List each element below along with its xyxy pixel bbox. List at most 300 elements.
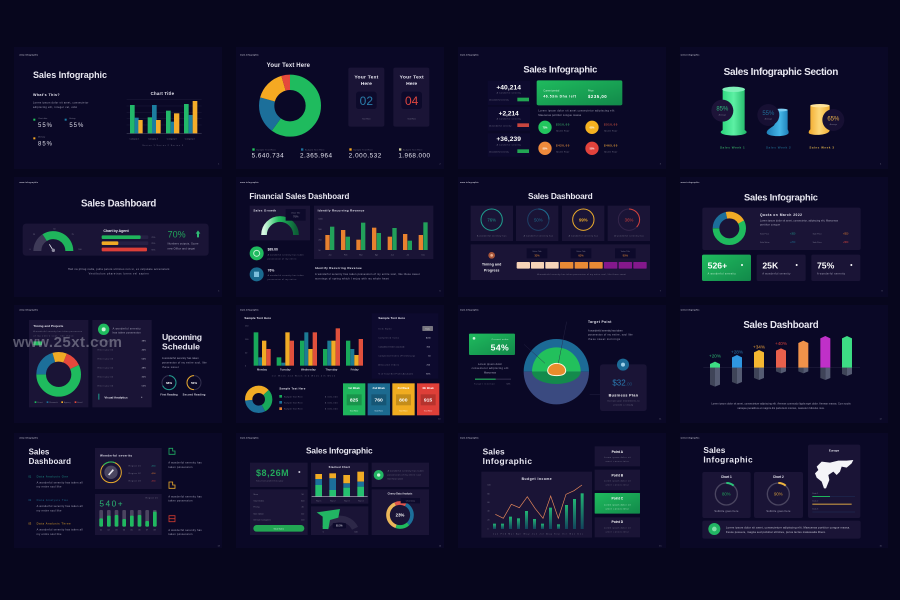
panel: timing donut: Direct bbox=[37, 401, 43, 404]
panel: stacked chart: Year 2 bbox=[330, 499, 335, 502]
target point text bbox=[588, 320, 633, 341]
panel: quota: +$50 bbox=[843, 233, 849, 235]
metric circles: Insert Your bbox=[604, 129, 618, 132]
percent labels: +20% bbox=[709, 354, 721, 359]
slide 8: quota panel: 8 bbox=[881, 291, 883, 293]
card: 99 percent: 99% bbox=[579, 217, 588, 222]
panel: sales growth: Sales Growth bbox=[253, 209, 276, 213]
metric circles: 80% bbox=[543, 148, 548, 150]
bar chart: Category 2 bbox=[148, 137, 158, 140]
slide 9: upcoming schedule: www.infographic bbox=[19, 309, 39, 312]
metric: percent: 76% bbox=[268, 268, 274, 272]
panel: chart 2: Subtitle goes here bbox=[766, 510, 791, 513]
metric circles: $465,00 bbox=[604, 144, 618, 148]
panel: timing donut: Timing and Projects bbox=[33, 324, 64, 328]
icon note 3: A wonderful serenity has bbox=[168, 529, 202, 532]
panel: rows: 100 bbox=[301, 520, 305, 522]
donut legend: $ 000,000 bbox=[325, 396, 339, 398]
business plan card bbox=[600, 359, 647, 411]
panel: wonderful severity bbox=[95, 448, 162, 489]
panel: sales growth: 76% bbox=[293, 215, 299, 219]
data table bbox=[372, 313, 438, 379]
grouped bar chart: Thursday bbox=[325, 368, 338, 372]
slide 14: sales infographic multi-panel: 14 bbox=[439, 546, 442, 548]
point A: Point A bbox=[612, 450, 624, 454]
grouped bar chart: Wednesday bbox=[301, 368, 316, 372]
slide 12: 3D bars: 12 bbox=[880, 418, 882, 420]
slide 2: donut with counters: 2 bbox=[439, 163, 441, 165]
title: Sales Infographic Section bbox=[724, 67, 838, 78]
metric: dollars bbox=[250, 246, 304, 260]
slide 14: sales infographic multi-panel: www.infographic bbox=[240, 436, 260, 439]
green highlight card: Price bbox=[588, 89, 594, 92]
description: Lorem ipsum dolor sit amet consectetur adipiscing elit bbox=[538, 109, 615, 112]
grouped bar chart: 150 bbox=[245, 326, 249, 328]
week card 1: Text Here bbox=[350, 410, 359, 413]
icon note 2: A wonderful serenity has bbox=[168, 495, 202, 498]
legend stats: 55% bbox=[38, 123, 53, 129]
panel: wonderful severity: Wonderful severity bbox=[100, 454, 132, 458]
caption bbox=[68, 268, 170, 276]
slide 1: sales infographic with bar chart bbox=[19, 54, 219, 165]
panel: timing and progress: Value Title bbox=[532, 250, 542, 253]
panel: chart 2 bbox=[754, 472, 803, 518]
title: Infographic bbox=[703, 455, 753, 465]
description and progress: consectetur adipiscing elit bbox=[472, 367, 509, 370]
title: Sales Dashboard bbox=[743, 320, 819, 331]
point C highlighted: Lorem ipsum dolor sit bbox=[604, 503, 631, 506]
panel: quota: porttitor congue bbox=[760, 224, 781, 227]
card: 36 percent: A wonderful serenity has bbox=[614, 235, 644, 238]
target point text: Target Point bbox=[588, 320, 612, 324]
bar chart: Series 1 Series 2 Series 3 bbox=[142, 144, 184, 147]
caption: Lorem ipsum dolor sit amet, consectetuer adipiscing elit. Aenean commodo ligula eget dolor. Aenean massa. Cum sociis bbox=[711, 403, 851, 406]
grouped bar chart: 100 bbox=[245, 339, 249, 341]
panel: budget income chart bbox=[481, 472, 592, 538]
week card 4 bbox=[417, 383, 439, 415]
panel: timing and progress: 60% bbox=[578, 253, 584, 257]
title: Sales bbox=[483, 446, 505, 456]
slide 2: donut with counters: www.infographic bbox=[240, 54, 260, 57]
week labels: Sales Week 3 bbox=[809, 146, 834, 150]
card: 50 percent: 50% bbox=[534, 217, 543, 222]
panel: rows: 50 bbox=[302, 494, 305, 496]
panel: recurring revenue chart: Mar bbox=[359, 253, 363, 256]
slide 16: Europe map and rings: 16 bbox=[880, 546, 883, 548]
panel: quota: Sale Price bbox=[760, 232, 770, 235]
gauge bbox=[29, 228, 83, 252]
card: 526+: A wonderful serenity bbox=[708, 273, 736, 276]
donut legend bbox=[279, 386, 339, 411]
panel: 540+ bars: 06 bbox=[138, 529, 141, 531]
panel: recurring revenue chart: Feb bbox=[344, 254, 348, 256]
panel: recurring revenue chart: Apr bbox=[375, 253, 379, 256]
panel: note bbox=[372, 463, 429, 487]
text block: mornings of spring which I enjoy with my whole heart bbox=[315, 278, 389, 281]
point B bbox=[595, 470, 640, 490]
heading: Your Text Here bbox=[267, 63, 311, 69]
list item 1: 01 bbox=[28, 474, 32, 478]
panel: schedule table bbox=[92, 320, 152, 407]
week card 3 bbox=[392, 383, 415, 415]
panel: quota: Sale Price bbox=[813, 241, 823, 244]
description and progress: Maecenas bbox=[484, 371, 497, 374]
slide 14: sales infographic multi-panel bbox=[240, 436, 442, 548]
metric circles: 60% bbox=[590, 127, 595, 129]
panel: timing donut: Agency bbox=[64, 401, 71, 404]
point B: amet consectetur bbox=[606, 483, 629, 486]
week labels: Sales Week 1 bbox=[720, 146, 745, 150]
list item 3: Data Analysis Three bbox=[37, 522, 71, 526]
panel: Europe map: Data 1 bbox=[812, 492, 818, 495]
slide 1: sales infographic with bar chart: www.infographic bbox=[19, 54, 39, 57]
data table: $200 bbox=[426, 338, 432, 340]
icon note 1: taken possession bbox=[168, 466, 193, 469]
sample donut bbox=[249, 389, 269, 409]
target point text: possession of my entire, soul like bbox=[588, 334, 633, 337]
slide 6: financial sales dashboard bbox=[240, 181, 441, 293]
panel: wonderful severity: +$50 bbox=[151, 473, 156, 475]
list item 3: my entire soul like bbox=[37, 533, 62, 536]
stat cards: +2,214 bbox=[499, 110, 519, 117]
panel: schedule table: Enter year 01 bbox=[98, 340, 113, 343]
metric circles: 75% bbox=[543, 127, 548, 129]
panel: timing and progress: Progress bbox=[484, 268, 499, 272]
reading rings bbox=[160, 376, 206, 396]
week card 3: 3rd Week bbox=[397, 386, 410, 390]
donut legend: Sample Text Here bbox=[284, 395, 304, 398]
list item 1: Data Analysis One bbox=[37, 474, 69, 478]
point D: Lorem ipsum dolor sit bbox=[604, 527, 631, 530]
slide 12: 3D bars bbox=[681, 309, 882, 420]
panel: budget income chart: 100 bbox=[487, 485, 492, 487]
list item 2: A wonderful serenity has taken all bbox=[37, 505, 83, 508]
panel: recurring revenue chart: Jun bbox=[391, 254, 394, 256]
week card 4: 915 bbox=[424, 398, 432, 404]
description and progress: Lorem ipsum dolor bbox=[478, 363, 502, 366]
data table: Completed Orders (Preliminary) bbox=[378, 354, 415, 357]
slide 8: quota panel: www.infographic bbox=[681, 181, 700, 184]
panel: stacked chart: Year 1 bbox=[316, 499, 321, 502]
metric: dollars: possession of my entire bbox=[268, 257, 297, 260]
counters bbox=[252, 148, 430, 160]
slide 8: quota panel bbox=[681, 181, 883, 293]
list item 1: A wonderful serenity has taken all bbox=[37, 481, 83, 484]
list item 2: 02 bbox=[28, 498, 32, 502]
counters: Sample Text Here bbox=[353, 148, 374, 151]
slide 3: sales infographic with stats: 3 bbox=[660, 163, 662, 165]
panel: donut analysis: Chart data bbox=[406, 500, 416, 503]
description bbox=[538, 109, 615, 117]
green stat card bbox=[469, 334, 515, 355]
gray bar bases bbox=[710, 368, 852, 387]
reading rings: Second Reading bbox=[183, 392, 206, 396]
panel: timing donut bbox=[29, 320, 88, 407]
panel: chart 2: 90% bbox=[774, 492, 783, 497]
panel: chart 1: Subtitle goes here bbox=[714, 510, 739, 513]
slide 10: weekly bars and table bbox=[240, 309, 441, 420]
slide 16: Europe map and rings: www.infographic bbox=[681, 436, 700, 439]
gauge: 0 bbox=[29, 249, 31, 251]
metric circles: Insert Your bbox=[556, 150, 570, 153]
panel: stacked chart: Year 4 bbox=[358, 499, 364, 502]
panel: wonderful severity: +$50 bbox=[151, 465, 156, 467]
panel: stacked chart: Stacked Chart bbox=[329, 465, 350, 469]
slide 5: sales dashboard gauge: 5 bbox=[218, 291, 220, 293]
card: 02: Your Text bbox=[354, 74, 379, 80]
green cylinder: Average bbox=[719, 113, 727, 116]
panel: schedule table: Visual Analytics bbox=[104, 395, 128, 399]
card: 99 percent bbox=[562, 206, 604, 241]
grouped bar chart: 1st Week 2nd Week 3rd Week 4th Week bbox=[272, 375, 335, 378]
panel: rows: 112 bbox=[301, 513, 304, 515]
agent bars: 70% bbox=[151, 237, 156, 239]
card: 50 percent bbox=[516, 206, 558, 241]
card: 76 percent: 76% bbox=[487, 217, 496, 222]
panel: budget income chart: 60 bbox=[487, 502, 490, 504]
bar chart: Category 1 bbox=[129, 137, 139, 140]
slide 10: weekly bars and table: www.infographic bbox=[240, 309, 260, 312]
panel: schedule table: Enter year 03 bbox=[98, 358, 114, 361]
panel: Europe map bbox=[808, 445, 860, 518]
title: Infographic bbox=[483, 456, 532, 466]
description bbox=[162, 357, 207, 369]
metric circles: Insert Your bbox=[604, 150, 618, 153]
list item 3: A wonderful serenity has taken all bbox=[37, 529, 83, 532]
metric circles: 50% bbox=[590, 148, 595, 150]
percent labels: +34% bbox=[753, 345, 765, 350]
caption: natoque penatibus et magnis dis parturient montes, nascetur ridiculus mus. bbox=[737, 407, 825, 410]
point A bbox=[595, 446, 640, 466]
what's this text: Lorem ipsum dolor sit amet, consectetur bbox=[33, 101, 89, 104]
title bbox=[703, 445, 753, 465]
donut chart bbox=[267, 82, 313, 129]
counters: Sample Text Here bbox=[305, 148, 325, 151]
data table: Completed Orders (Locked) bbox=[378, 346, 405, 349]
description and progress: Target revenue bbox=[474, 382, 496, 385]
data table: Sample Text Here bbox=[378, 316, 405, 320]
panel: schedule table: 48% bbox=[142, 367, 146, 369]
point B: Point B bbox=[612, 473, 624, 477]
list item 2: Data Analysis Two bbox=[37, 498, 69, 502]
panel: gauge bbox=[311, 506, 368, 535]
list item 2: my entire soul like bbox=[37, 509, 62, 512]
panel: timing and progress: Value Title bbox=[621, 250, 631, 253]
card: 99 percent: A wonderful serenity has bbox=[569, 235, 598, 238]
card: 50 percent: A wonderful serenity has bbox=[524, 235, 553, 238]
legend stats: Memory bbox=[38, 135, 45, 138]
panel: rows: 300 bbox=[301, 500, 305, 502]
70 percent stat: Numbers outputs, Score bbox=[168, 243, 199, 246]
panel: schedule table: has taken possession bbox=[113, 332, 141, 335]
title bbox=[29, 447, 71, 466]
point D: amet consectetur bbox=[606, 531, 629, 534]
metric: percent bbox=[250, 267, 304, 281]
title: Sales Dashboard bbox=[528, 191, 593, 201]
panel: recurring revenue chart: Identify Recurring Revenue bbox=[318, 209, 365, 213]
panel: schedule table: 35% bbox=[142, 376, 146, 378]
card: 526+ bbox=[702, 255, 751, 281]
slide 15: budget income: 15 bbox=[659, 546, 662, 548]
slide 13: sales dashboard list: 13 bbox=[218, 546, 221, 548]
point D: Point D bbox=[612, 520, 624, 524]
slide 1: sales infographic with bar chart: 1 bbox=[218, 163, 219, 165]
data table: 80% bbox=[426, 373, 431, 375]
yellow cylinder: Average bbox=[830, 123, 838, 126]
panel: quota: +250 bbox=[790, 242, 796, 244]
panel: quota: Sale Value bbox=[760, 242, 770, 244]
panel: rows bbox=[250, 489, 308, 535]
panel: timing and progress: Timing and bbox=[482, 263, 501, 267]
list item 3: 03 bbox=[28, 522, 32, 526]
slide 7: sales dashboard progress: 7 bbox=[660, 291, 661, 293]
panel: 540+ bars bbox=[95, 494, 162, 535]
bar chart: Category 3 bbox=[167, 137, 177, 140]
metric circles bbox=[538, 121, 618, 155]
card: 04: Text Here bbox=[407, 118, 417, 121]
panel: timing and progress bbox=[471, 244, 650, 280]
caption: Vestibulum pharetras lorem vel sapien bbox=[89, 273, 149, 276]
icon note 2 bbox=[168, 482, 202, 503]
slide 9: upcoming schedule bbox=[19, 309, 207, 407]
green stat card: 54% bbox=[491, 343, 509, 353]
slide 16: Europe map and rings bbox=[681, 436, 883, 548]
stat cards: A wonderful serenity bbox=[497, 143, 521, 146]
data table: Allocated Orders bbox=[378, 363, 399, 366]
slide 5: sales dashboard gauge bbox=[19, 181, 220, 293]
panel: note: like these sweet bbox=[388, 478, 403, 481]
panel: Europe map: Europe bbox=[829, 449, 839, 453]
panel: timing and progress: A wonderful serenity has taken possession of my entire soul, like these sweet bbox=[537, 273, 626, 276]
title: Sales bbox=[703, 445, 726, 455]
panel: revenue bbox=[250, 463, 308, 487]
metric circles: $420,00 bbox=[556, 144, 570, 148]
gauge: 75 bbox=[72, 234, 75, 236]
description: these sweet bbox=[162, 366, 179, 369]
card: 04: 04 bbox=[405, 94, 419, 108]
gauge: 100 bbox=[78, 249, 83, 251]
stat cards: A wonderful serenity bbox=[489, 99, 509, 102]
panel: revenue: $8,26M bbox=[256, 468, 289, 478]
slide 11: target point: 11 bbox=[659, 418, 661, 420]
panel: timing donut: A wonderful serenity has taken possession bbox=[33, 330, 82, 333]
grouped bar chart: 50 bbox=[245, 352, 248, 354]
slide 13: sales dashboard list: www.infographic bbox=[19, 436, 39, 439]
stat cards: A wonderful serenity bbox=[497, 117, 521, 120]
panel: 540+ bars: 540+ bbox=[99, 499, 123, 509]
data table: 50 bbox=[428, 355, 431, 357]
stat cards: A wonderful serenity bbox=[497, 91, 521, 94]
slide 6: financial sales dashboard: 6 bbox=[439, 291, 441, 293]
card: 76 percent: A wonderful serenity has bbox=[477, 235, 506, 238]
gauge: 50 bbox=[53, 228, 56, 230]
panel: rows: Pricing bbox=[253, 506, 259, 509]
metric circles: $510,00 bbox=[556, 123, 570, 127]
slide 13: sales dashboard list bbox=[19, 436, 221, 548]
watermark: www.25xt.com bbox=[12, 334, 122, 351]
card: 25K: A wonderful serenity bbox=[762, 273, 791, 276]
card: 04: Here bbox=[406, 81, 417, 87]
legend stats: 55% bbox=[69, 123, 84, 129]
week card 2: Text Here bbox=[374, 410, 384, 413]
blue cylinder bbox=[757, 104, 789, 136]
title: Sales Dashboard bbox=[81, 199, 156, 210]
panel: wonderful severity: +$50 bbox=[151, 481, 156, 483]
panel: donut analysis: Cherry Data Analysis bbox=[388, 493, 413, 496]
panel: note: possession of my entire soul bbox=[388, 474, 422, 477]
grouped bar chart: Friday bbox=[351, 368, 359, 372]
card: 76 percent bbox=[471, 206, 513, 241]
panel: 540+ bars: 05 bbox=[131, 529, 134, 531]
title: Dashboard bbox=[29, 457, 71, 466]
panel: recurring revenue chart: 50 bbox=[318, 250, 321, 252]
card: 25K: 25K bbox=[762, 260, 779, 270]
card: 04: Your Text bbox=[400, 74, 424, 80]
panel: rows: Ultimate Categories bbox=[253, 519, 271, 522]
stat cards: +40,214 bbox=[496, 84, 521, 91]
icon note 1 bbox=[168, 448, 202, 469]
week card 1: 825 bbox=[350, 398, 358, 404]
card: 36 percent: 36% bbox=[625, 217, 633, 222]
metric: percent: A wonderful serenity has taken bbox=[268, 274, 304, 277]
panel: timing and progress: Value Title bbox=[576, 250, 586, 253]
text block: Identify Recurring Revenue bbox=[315, 266, 362, 270]
heading: upcoming schedule: Schedule bbox=[162, 342, 200, 352]
panel: chart 1: Chart 1 bbox=[721, 475, 732, 479]
donut legend: $ 000,000 bbox=[325, 409, 339, 411]
heading: upcoming schedule bbox=[162, 332, 202, 352]
point D bbox=[595, 517, 640, 537]
panel: stacked chart: Year 3 bbox=[344, 499, 350, 502]
week card 1: 1st Week bbox=[348, 386, 360, 390]
grouped bar chart: Tuesday bbox=[280, 368, 291, 372]
target point text: these sweet mornings bbox=[588, 338, 621, 341]
panel: chart 1: 80% bbox=[722, 492, 731, 497]
panel: sales growth bbox=[250, 206, 310, 240]
green stat card: Current value bbox=[492, 338, 509, 341]
title: Sales Infographic bbox=[523, 64, 597, 74]
stat cards bbox=[488, 81, 530, 157]
description and progress: 54% bbox=[506, 383, 511, 385]
point C highlighted: amet consectetur bbox=[606, 507, 629, 510]
card: 36 percent bbox=[608, 206, 650, 241]
70 percent stat: new Office and target bbox=[168, 247, 195, 250]
week card 3: 800 bbox=[399, 398, 408, 404]
icon note 1: A wonderful serenity has bbox=[168, 462, 202, 465]
yellow cylinder: 65% bbox=[827, 117, 840, 123]
panel: rows: Total Sales bbox=[273, 527, 284, 530]
panel: 540+ bars: 02 bbox=[108, 529, 110, 531]
data table: Item Name bbox=[378, 328, 393, 331]
panel: budget income chart: 80 bbox=[487, 493, 490, 495]
panel: note: A wonderful serenity has taken bbox=[388, 470, 424, 473]
metric circles: Insert Your bbox=[556, 129, 570, 132]
panel: rows: 40 bbox=[302, 507, 305, 509]
slide 6: financial sales dashboard: www.infographic bbox=[240, 181, 260, 184]
slide 5: sales dashboard gauge: www.infographic bbox=[19, 181, 39, 184]
card: 75%: 75% bbox=[817, 260, 835, 270]
panel: wonderful severity: Region 03 bbox=[129, 481, 142, 483]
legend stats: Chart data bbox=[38, 117, 48, 120]
panel: gauge: 100 bbox=[354, 531, 359, 533]
panel: stacked chart bbox=[311, 463, 368, 504]
panel: schedule table: 55% bbox=[142, 385, 146, 387]
panel: Europe map: Data 3 bbox=[812, 508, 819, 511]
panel: timing and progress: 90% bbox=[623, 253, 629, 257]
counters: 2.365.964 bbox=[300, 153, 332, 160]
counters: Sample Text Here bbox=[256, 148, 277, 151]
panel: timing donut: of my entire soul, like these bbox=[33, 334, 74, 337]
